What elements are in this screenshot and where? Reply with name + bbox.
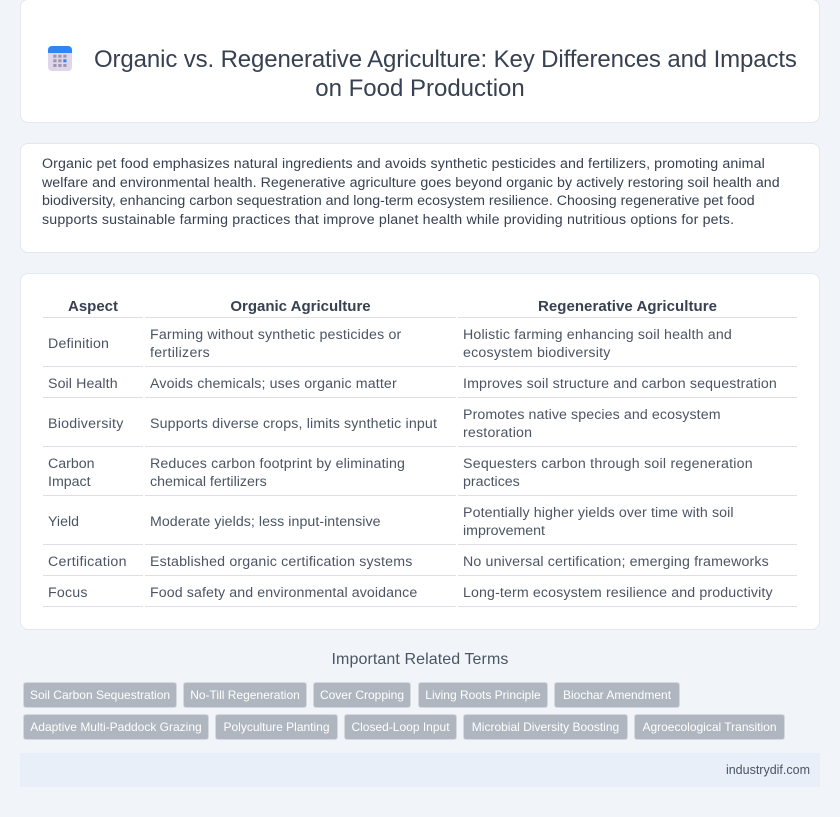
tag: Soil Carbon Sequestration	[30, 688, 170, 702]
title: on Food Production	[315, 75, 525, 102]
table header: Organic Agriculture	[230, 298, 371, 315]
table header	[68, 298, 717, 315]
tag: Living Roots Principle	[425, 688, 541, 702]
tag	[634, 714, 785, 740]
row: yield	[48, 505, 734, 539]
tag: Cover Cropping	[320, 688, 404, 702]
row: yield: improvement	[463, 523, 545, 539]
comparison table panel	[20, 273, 820, 630]
intro text panel: supports sustainable farming practices that improve planet health while providing nutritious options for pets.	[42, 212, 734, 228]
intro text panel: welfare and environmental health. Regenerative agriculture goes beyond organic by actively restoring soil health and	[42, 175, 780, 191]
row: soil health: Soil Health	[48, 376, 118, 392]
tag	[313, 682, 411, 708]
intro text panel: Organic pet food emphasizes natural ingredients and avoids synthetic pesticides and fertilizers, promoting animal	[42, 156, 765, 172]
row: definition: fertilizers	[150, 345, 210, 361]
tag: No-Till Regeneration	[190, 688, 300, 702]
tag: Closed-Loop Input	[351, 720, 450, 734]
table header: Aspect	[68, 298, 118, 315]
tag: Biochar Amendment	[563, 688, 671, 702]
row: carbon impact: chemical fertilizers	[150, 474, 267, 490]
row: biodiversity: Promotes native species and ecosystem	[463, 407, 721, 423]
table	[43, 298, 797, 607]
tag	[215, 714, 338, 740]
row: carbon impact: practices	[463, 474, 520, 490]
title: Organic vs. Regenerative Agriculture: Key Differences and Impacts	[94, 46, 797, 73]
row: definition: Holistic farming enhancing soil health and	[463, 327, 732, 343]
tag	[554, 682, 680, 708]
row: soil health	[48, 376, 777, 392]
row: focus	[48, 585, 773, 601]
row: biodiversity	[48, 407, 721, 441]
intro text panel: biodiversity, enhancing carbon sequestration and long-term ecosystem resilience. Choosing regenerative pet food	[42, 193, 755, 209]
tag	[418, 682, 548, 708]
row: certification: No universal certification; emerging frameworks	[463, 554, 769, 570]
row: definition	[48, 327, 732, 361]
row: biodiversity: restoration	[463, 425, 532, 441]
row: certification: Certification	[48, 554, 127, 570]
row: focus: Food safety and environmental avoidance	[150, 585, 417, 601]
row: carbon impact	[48, 456, 753, 490]
row: definition: Farming without synthetic pesticides or	[150, 327, 401, 343]
row: definition: ecosystem biodiversity	[463, 345, 611, 361]
related terms heading: Important Related Terms	[332, 651, 508, 668]
row: carbon impact: Sequesters carbon through soil regeneration	[463, 456, 753, 472]
row: biodiversity: Supports diverse crops, limits synthetic input	[150, 416, 437, 432]
tag: Adaptive Multi-Paddock Grazing	[30, 720, 202, 734]
header panel	[20, 0, 820, 123]
row: yield: Moderate yields; less input-intensive	[150, 514, 381, 530]
row: biodiversity: Biodiversity	[48, 416, 124, 432]
row: carbon impact: Carbon	[48, 456, 95, 472]
tag	[344, 714, 457, 740]
tag	[183, 682, 307, 708]
row: soil health: Improves soil structure and carbon sequestration	[463, 376, 777, 392]
tag	[23, 714, 209, 740]
row: soil health: Avoids chemicals; uses organic matter	[150, 376, 397, 392]
icon: calendar	[48, 46, 72, 71]
footer site name: industrydif.com	[726, 763, 810, 777]
intro text panel	[20, 143, 820, 253]
row: yield: Potentially higher yields over time with soil	[463, 505, 734, 521]
row: carbon impact: Impact	[48, 474, 91, 490]
row: certification	[48, 554, 769, 570]
row: carbon impact: Reduces carbon footprint by eliminating	[150, 456, 405, 472]
row: focus: Long-term ecosystem resilience and productivity	[463, 585, 773, 601]
table header: Regenerative Agriculture	[538, 298, 717, 315]
row: certification: Established organic certification systems	[150, 554, 412, 570]
tag	[23, 682, 177, 708]
tag: Polyculture Planting	[223, 720, 330, 734]
tag: Agroecological Transition	[642, 720, 777, 734]
title	[94, 46, 797, 102]
row: focus: Focus	[48, 585, 88, 601]
tag	[463, 714, 628, 740]
related terms tags	[23, 682, 785, 740]
row: definition: Definition	[48, 336, 109, 352]
footer bar	[20, 753, 820, 787]
row: yield: Yield	[48, 514, 79, 530]
tag: Microbial Diversity Boosting	[472, 720, 619, 734]
